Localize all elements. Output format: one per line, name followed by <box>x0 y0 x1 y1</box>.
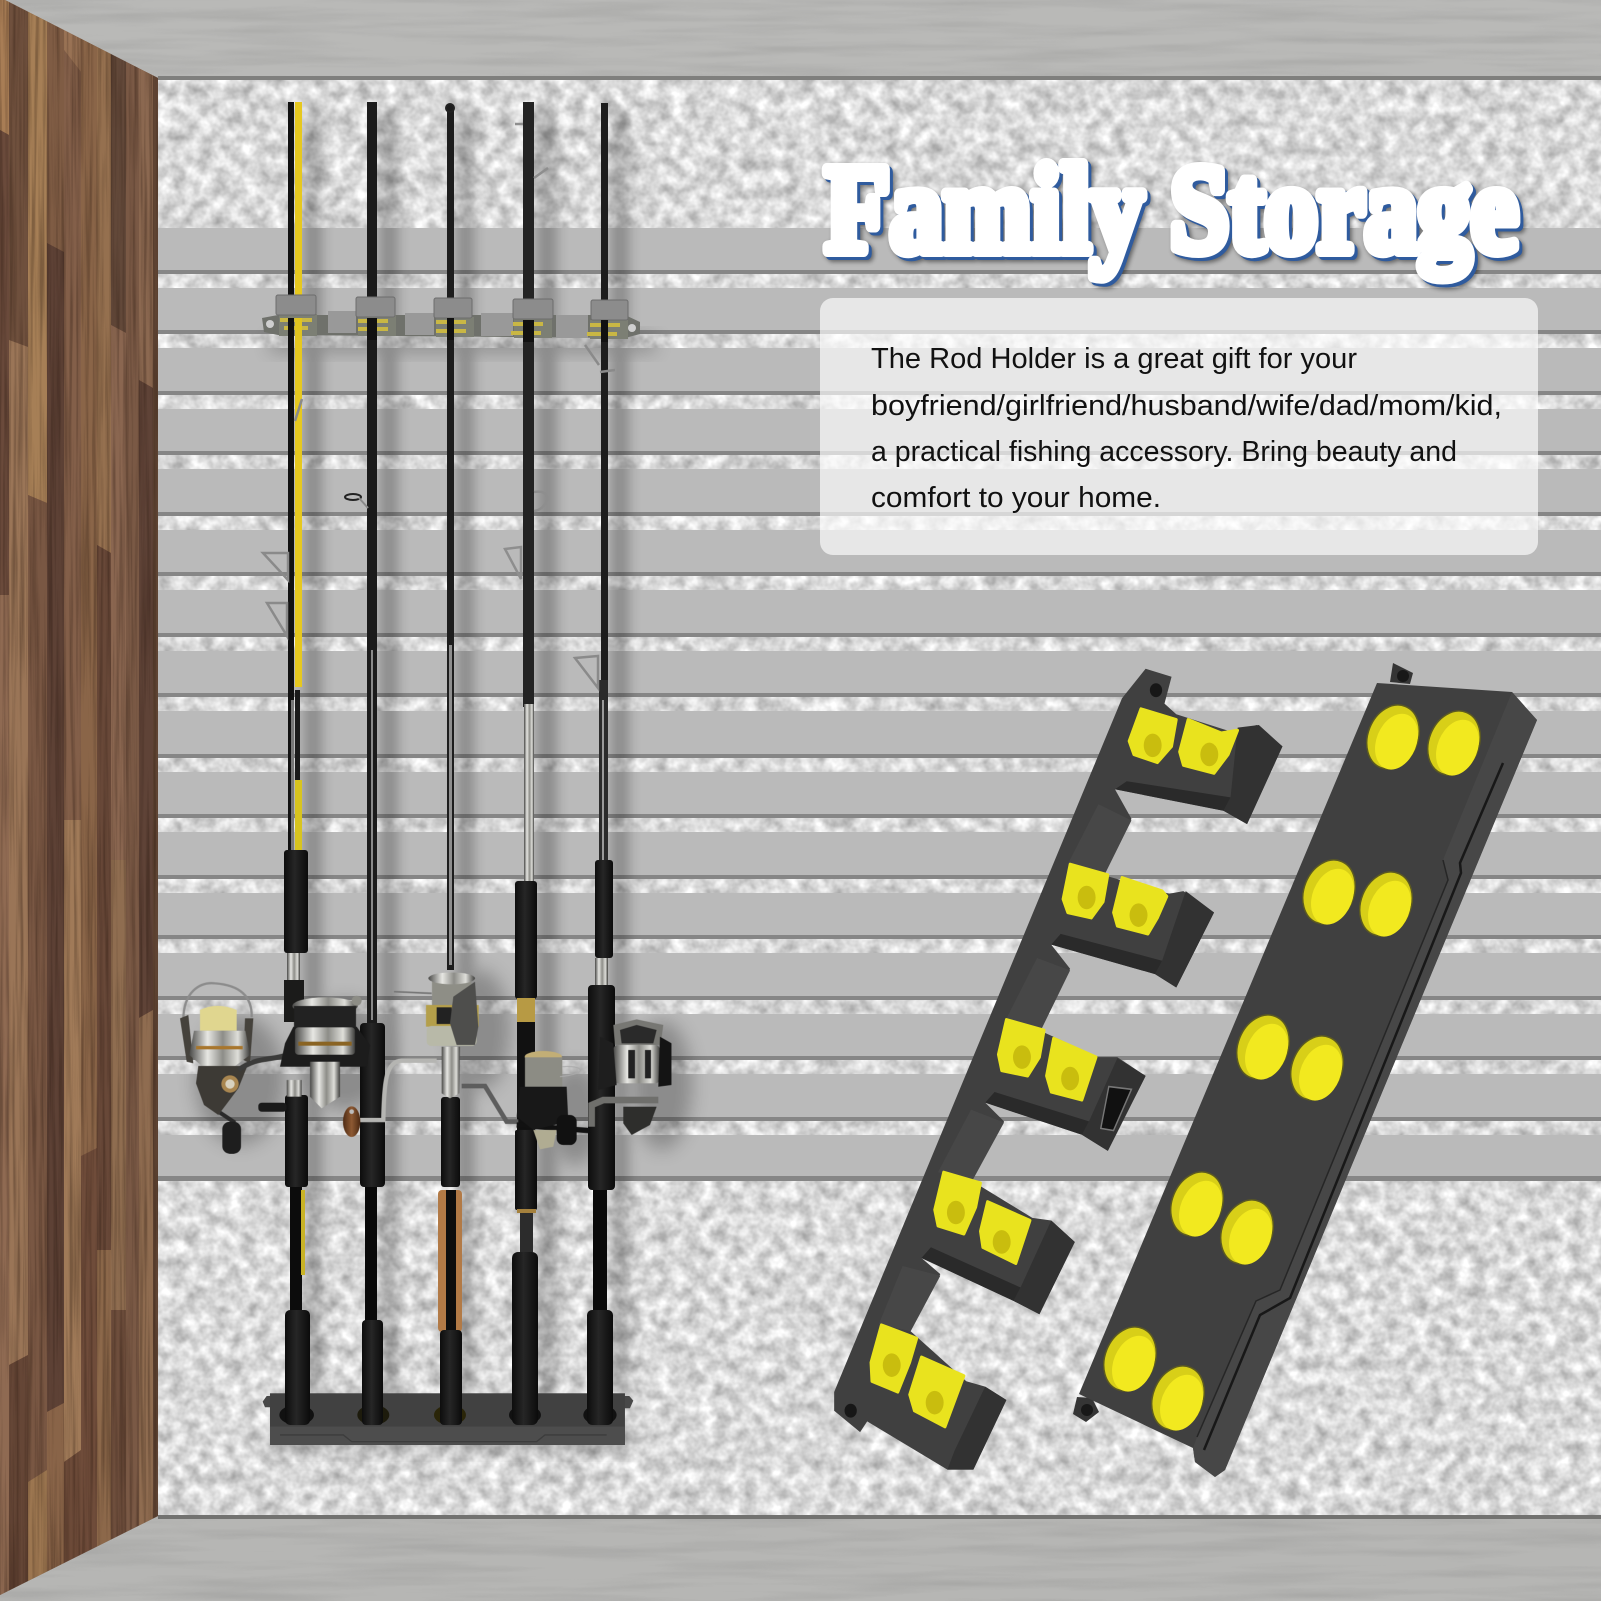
reel 5 <box>592 1019 672 1135</box>
mounting ears <box>1073 663 1413 1422</box>
bracket connectors <box>328 311 588 338</box>
yellow sockets <box>1094 697 1490 1438</box>
product: flat lower holder <box>1073 663 1537 1477</box>
wood side wall <box>0 0 158 1601</box>
yellow clip row 4 <box>935 1172 1030 1263</box>
plate body <box>1079 683 1537 1477</box>
strap slot <box>1101 1087 1131 1131</box>
bevel groove lines <box>1197 860 1448 1437</box>
bracket cap blocks <box>276 295 628 320</box>
product: notched upper holder <box>834 669 1282 1470</box>
rod shafts through bracket <box>288 318 608 342</box>
bracket clamps <box>279 314 628 339</box>
holder silhouette <box>834 669 1282 1470</box>
reel 3 with wooden crank knob <box>343 972 479 1137</box>
inner column faces <box>879 804 1131 1331</box>
rod 5: slim black blank <box>575 103 615 1425</box>
reel 2 <box>258 996 370 1112</box>
cast shadows of rods and reels <box>195 110 692 1450</box>
yellow clip row 5 <box>871 1325 964 1427</box>
yellow clip row 3 <box>998 1020 1096 1100</box>
rod 1: yellow and black <box>263 102 310 1425</box>
floor <box>0 1514 1601 1601</box>
yellow clip row 2 <box>1063 864 1167 934</box>
mounting holes <box>845 683 1162 1418</box>
description text <box>871 343 1502 514</box>
description text: a practical fishing accessory. Bring beauty and <box>871 436 1457 468</box>
yellow clips <box>280 318 620 336</box>
yellow clip row 1 <box>1129 709 1238 773</box>
arm end caps <box>947 725 1282 1470</box>
reel 4 <box>462 1051 590 1149</box>
description text: The Rod Holder is a great gift for your <box>871 343 1357 375</box>
arm undersides <box>921 781 1231 1301</box>
side bevel <box>1193 692 1537 1477</box>
rod 4: black with gold trim <box>505 102 548 1425</box>
rod 2: black blank <box>345 102 385 1425</box>
base floor rack <box>263 1393 633 1445</box>
description panel <box>820 298 1538 555</box>
reel 1 <box>180 983 287 1154</box>
rod 3: cork grip <box>438 104 462 1425</box>
fishing reels group <box>180 972 672 1154</box>
description text: comfort to your home. <box>871 482 1161 514</box>
ceiling <box>0 0 1601 80</box>
slatwall panels <box>158 228 1601 1181</box>
description text: boyfriend/girlfriend/husband/wife/dad/mom/kid, <box>871 390 1502 422</box>
top wall bracket <box>262 295 640 342</box>
